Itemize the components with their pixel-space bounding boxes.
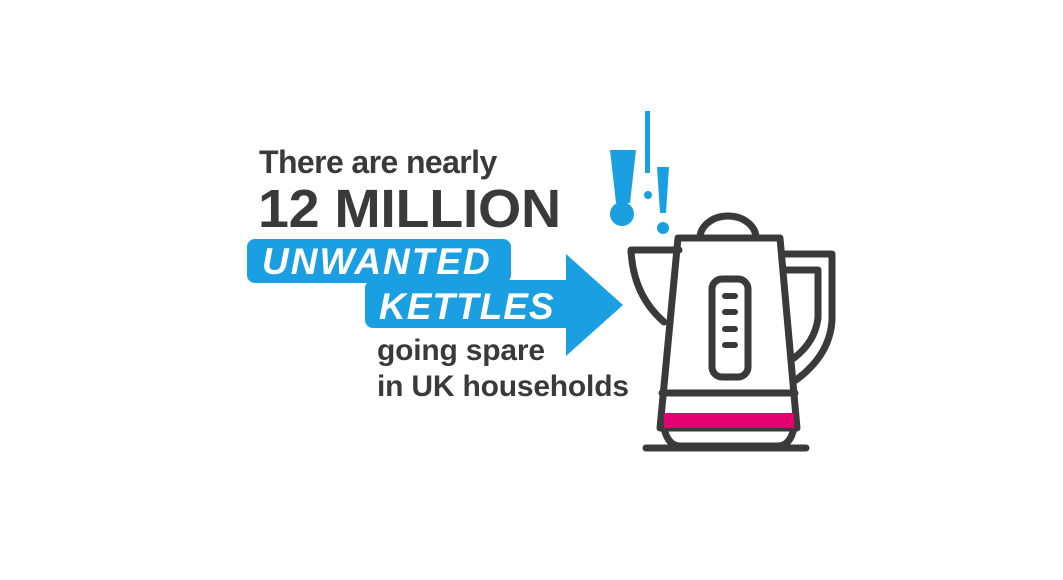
kettle	[631, 216, 832, 448]
exclamation marks	[610, 111, 669, 234]
text: UNWANTED: UNWANTED	[262, 241, 492, 282]
text: going spare in UK households	[377, 334, 629, 403]
text: going spare in UK households: going spare	[377, 334, 545, 367]
text: 12 MILLION: 12 MILLION	[258, 179, 561, 239]
text: There are nearly: There are nearly	[259, 144, 497, 180]
text: KETTLES: KETTLES	[379, 286, 555, 327]
text: going spare in UK households: in UK households	[377, 370, 629, 403]
